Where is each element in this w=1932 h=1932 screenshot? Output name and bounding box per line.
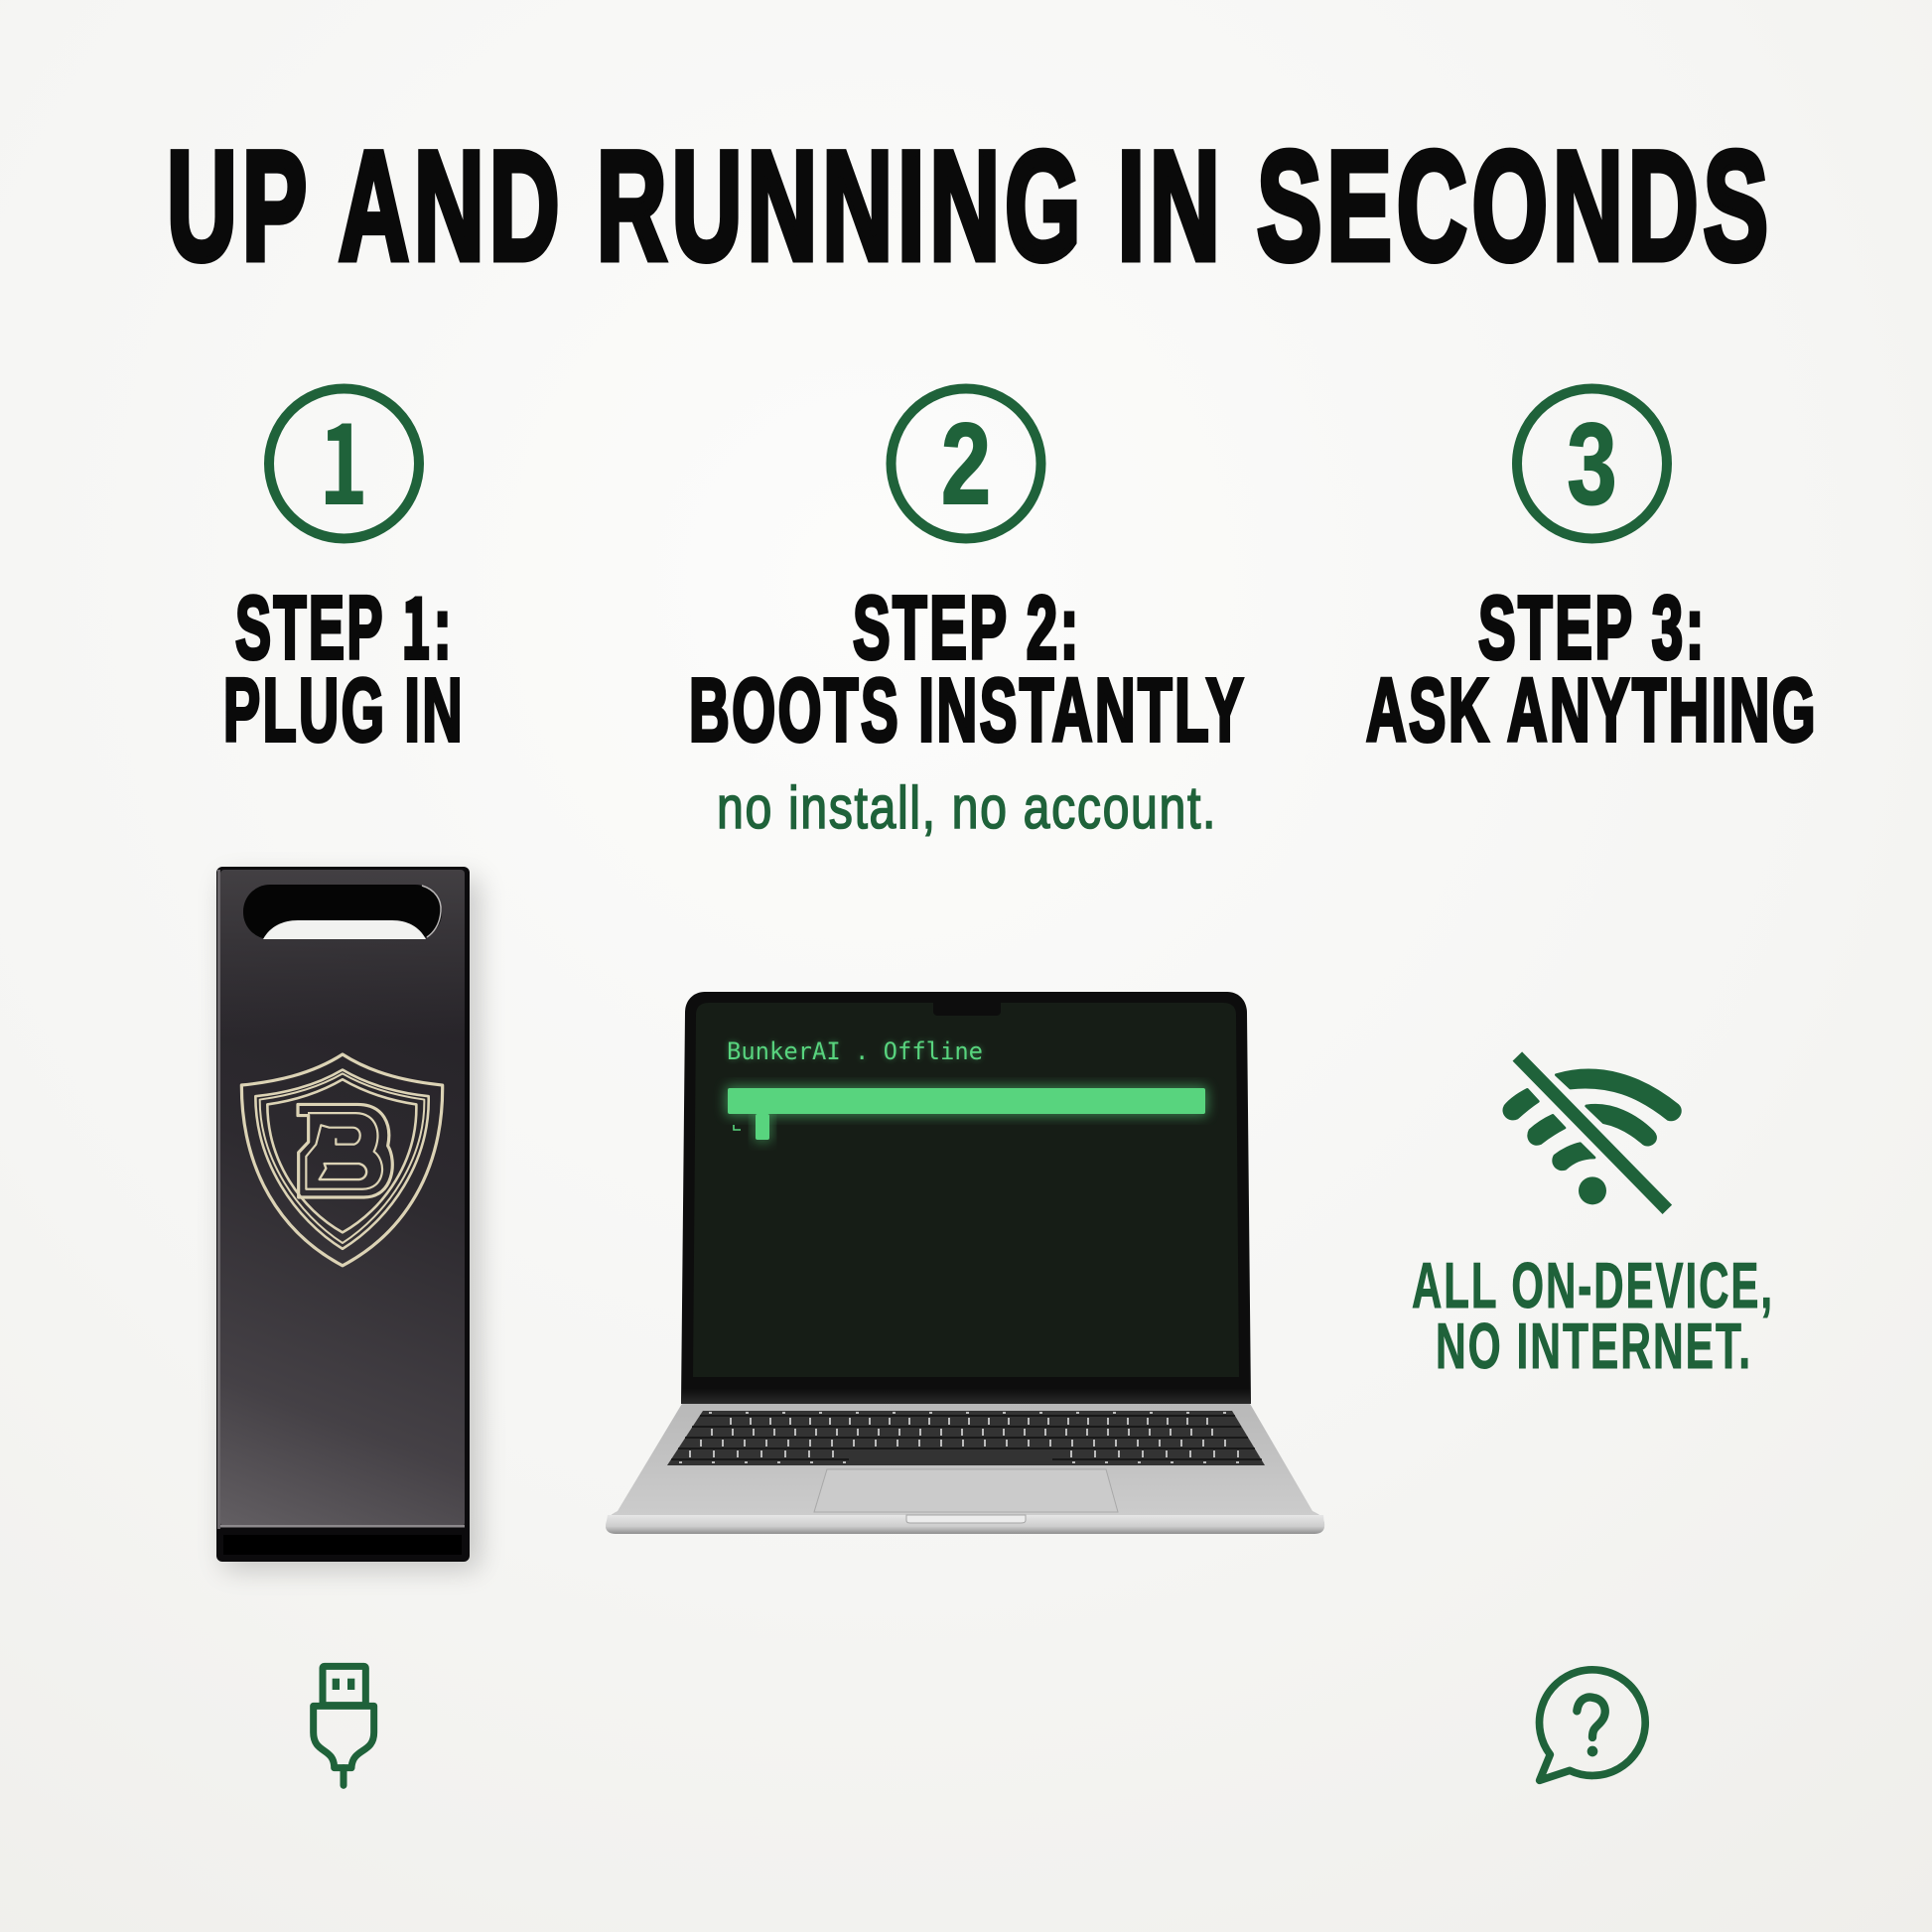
step 1 heading: STEP 1: xyxy=(235,563,454,683)
laptop base xyxy=(606,1402,1324,1534)
screen xyxy=(693,1003,1239,1377)
on-device note: NO INTERNET. xyxy=(1436,1310,1752,1382)
step 2 subtext: no install, no account. xyxy=(717,774,1217,841)
step 2 heading xyxy=(689,579,1246,760)
icon: wifi off xyxy=(1504,1056,1680,1209)
step 3 number badge xyxy=(1517,389,1667,538)
step 3 heading: STEP 3: xyxy=(1478,579,1707,678)
panel: step 1 xyxy=(216,374,479,1785)
panel: step 2 xyxy=(606,389,1324,1534)
lanyard slot xyxy=(243,885,442,939)
step 2 number badge: 2 xyxy=(941,399,991,528)
step 3 number badge: 3 xyxy=(1567,399,1616,528)
green progress bar xyxy=(726,1086,1207,1142)
step 2 heading: BOOTS INSTANTLY xyxy=(689,661,1246,760)
on-device note xyxy=(1412,1249,1774,1382)
terminal text: BunkerAI . Offline xyxy=(727,1037,983,1065)
step 1 heading: PLUG IN xyxy=(223,661,465,760)
keyboard xyxy=(667,1411,1265,1465)
step 2 number badge xyxy=(892,389,1040,538)
panel: step 3 xyxy=(1366,389,1818,1780)
USB drive xyxy=(216,867,479,1569)
icon: question speech bubble xyxy=(1540,1670,1645,1780)
thumb notch xyxy=(906,1515,1026,1523)
laptop xyxy=(606,992,1324,1534)
step 3 heading xyxy=(1366,579,1818,760)
icon: USB plug xyxy=(314,1666,374,1785)
drive front face xyxy=(220,870,465,1527)
laptop lid xyxy=(681,992,1251,1404)
step 1 number badge xyxy=(269,374,419,538)
shield logo xyxy=(241,1054,443,1266)
trackpad xyxy=(814,1469,1118,1512)
step 1 heading xyxy=(223,563,465,760)
step 2 heading: STEP 2: xyxy=(853,579,1081,678)
step 1 number badge: 1 xyxy=(319,374,368,537)
terminal text: BunkerAI . Offline xyxy=(727,1037,983,1065)
